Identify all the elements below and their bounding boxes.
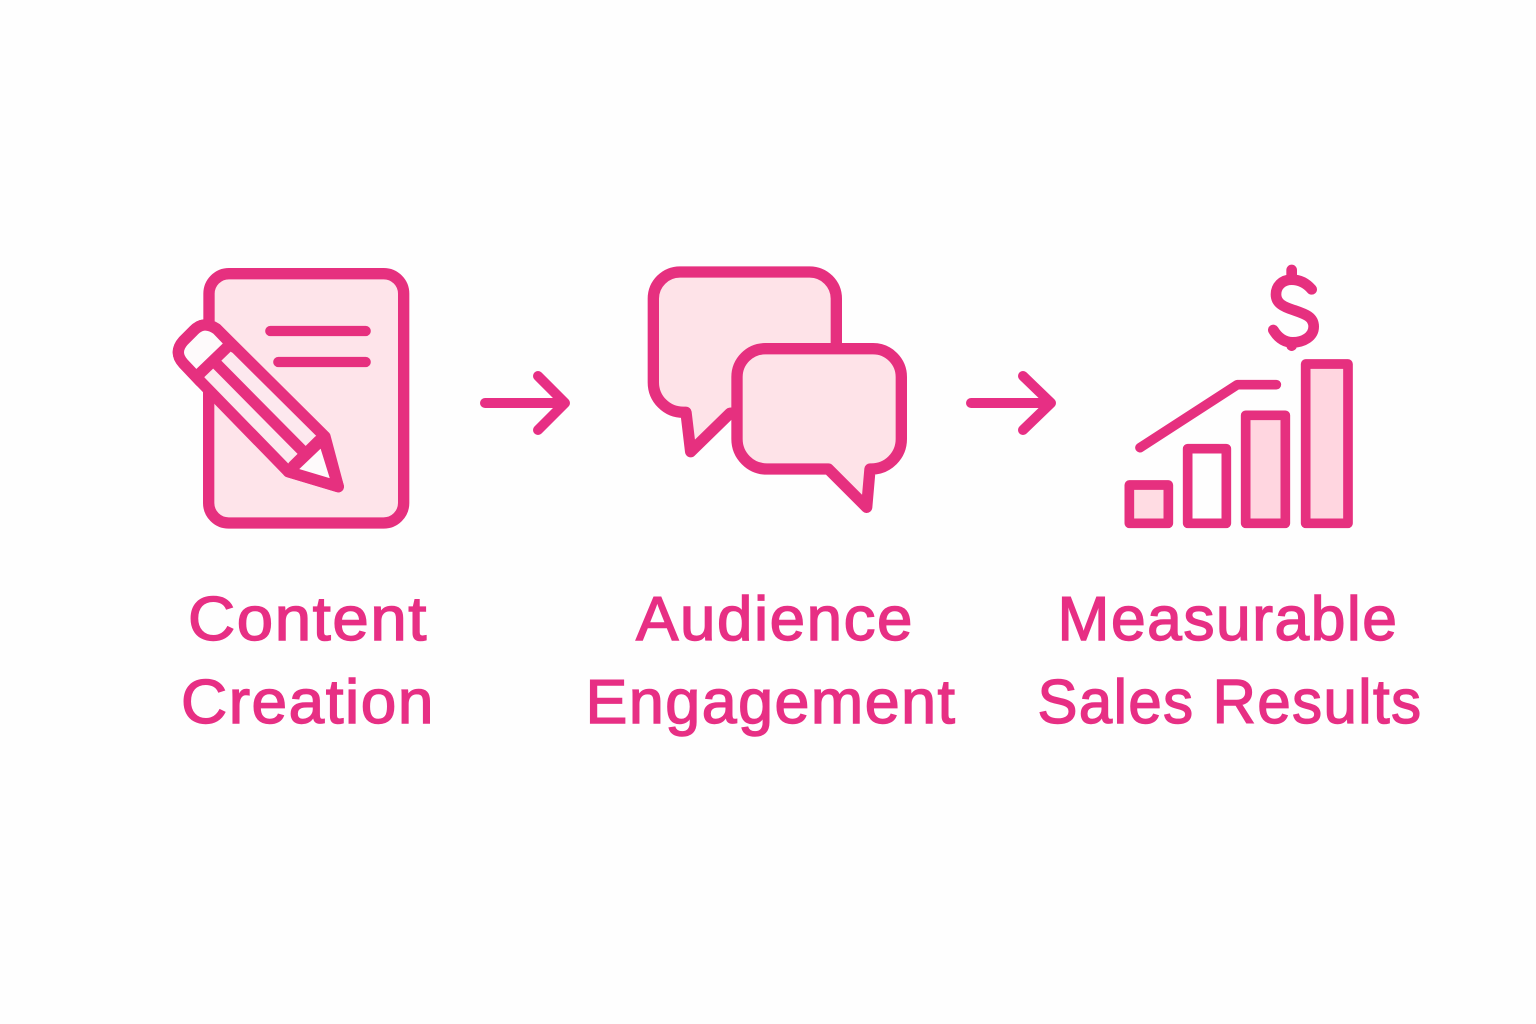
icon: document with pencil: [178, 274, 404, 523]
icon: rising bar chart with dollar: [1129, 270, 1348, 523]
label: Measurable Sales Results: Sales Results: [1038, 668, 1422, 737]
label: Audience Engagement: Audience: [636, 585, 914, 654]
label: Audience Engagement: Engagement: [586, 668, 956, 737]
label: Content Creation: Creation: [181, 668, 435, 737]
label: Measurable Sales Results: Measurable: [1058, 585, 1398, 654]
label: Measurable Sales Results: [1038, 585, 1422, 737]
bar 1: [1129, 485, 1168, 523]
trend line: [1140, 385, 1276, 448]
bar 4: [1306, 364, 1348, 523]
label: Content Creation: [181, 585, 435, 737]
bar 3: [1246, 415, 1285, 523]
label: Content Creation: Content: [188, 585, 428, 654]
arrow: engagement to sales: [971, 376, 1051, 430]
arrow: content to engagement: [485, 376, 565, 430]
dollar sign: [1273, 270, 1314, 346]
bar 2: [1188, 449, 1226, 523]
label: Audience Engagement: [586, 585, 956, 737]
icon: speech bubbles: [653, 272, 901, 507]
